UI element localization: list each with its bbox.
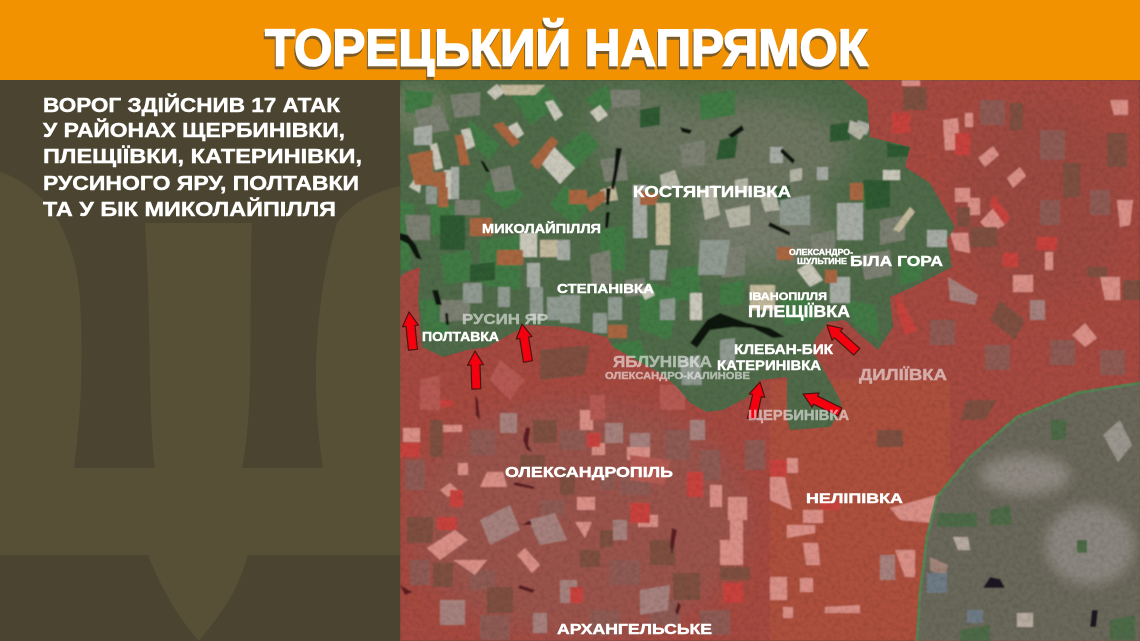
summary text: РУСИНОГО ЯРУ, ПОЛТАВКИ: [43, 173, 359, 195]
attack arrows: [401, 311, 862, 421]
summary text: [43, 93, 362, 221]
summary text: ПЛЕЩІЇВКИ, КАТЕРИНІВКИ,: [43, 145, 362, 168]
map place labels: ЯБЛУНІВКА: [613, 354, 712, 371]
map place labels: НЕЛІПІВКА: [806, 490, 903, 506]
map place labels: КАТЕРИНІВКА: [717, 357, 821, 373]
arrow: Rusyn Yar: [514, 323, 536, 363]
map place labels: ЩЕРБИНІВКА: [748, 407, 849, 424]
map place labels: МИКОЛАЙПІЛЛЯ: [482, 221, 601, 236]
map place labels: КОСТЯНТИНІВКА: [633, 184, 792, 201]
map place labels: ДИЛІЇВКА: [859, 366, 948, 384]
map place labels: РУСИН ЯР: [462, 311, 548, 328]
arrow: Shcherbynivka: [799, 387, 843, 419]
header bar: [0, 0, 1140, 80]
map: reservoir and gullies: [690, 313, 785, 348]
map: occupied territory in red: [400, 80, 1140, 641]
map place labels: БІЛА ГОРА: [850, 253, 943, 270]
map place labels: ОЛЕКСАНДРОПІЛЬ: [505, 464, 673, 481]
summary text: У РАЙОНАХ ЩЕРБИНІВКИ,: [43, 118, 345, 142]
map: muted and mid-tone fields: [405, 100, 1125, 640]
map place labels: [422, 184, 948, 638]
map place labels: ІВАНОПІЛЛЯ: [749, 291, 827, 303]
map: dark gullies in occupied area: [400, 395, 681, 615]
title: ТОРЕЦЬКИЙ НАПРЯМОК: [265, 18, 868, 78]
summary text: ВОРОГ ЗДІЙСНИВ 17 АТАК: [43, 93, 341, 117]
arrow: Poltavka south: [467, 351, 484, 389]
map place labels: ПЛЕЩІЇВКА: [748, 302, 850, 321]
map place labels: ПОЛТАВКА: [422, 329, 500, 344]
map: front-line free territory fields: [390, 80, 1000, 460]
arrow: Katerynivka: [744, 380, 768, 421]
trident emblem watermark: [0, 172, 400, 641]
map: south-east zone: [917, 384, 1140, 641]
satellite map: [390, 80, 1140, 641]
map place labels: ОЛЕКСАНДРО-КАЛИНОВЕ: [605, 370, 750, 382]
map place labels: АРХАНГЕЛЬСЬКЕ: [557, 621, 712, 638]
arrow: Pleshchiivka: [822, 319, 862, 358]
map: pale fields in occupied area: [403, 80, 1133, 618]
map: contact-line strip around south-east zone: [917, 383, 1140, 641]
map place labels: СТЕПАНІВКА: [557, 281, 655, 296]
map: satellite grain texture: [400, 80, 1140, 641]
map place labels: КЛЕБАН-БИК: [734, 341, 833, 357]
summary text: ТА У БІК МИКОЛАЙПІЛЛЯ: [43, 197, 336, 221]
map place labels: ОЛЕКСАНДРО-: [789, 247, 853, 257]
left text panel: [0, 80, 400, 641]
arrow: Poltavka west: [401, 311, 421, 351]
map place labels: ШУЛЬТИНЕ: [797, 256, 847, 266]
